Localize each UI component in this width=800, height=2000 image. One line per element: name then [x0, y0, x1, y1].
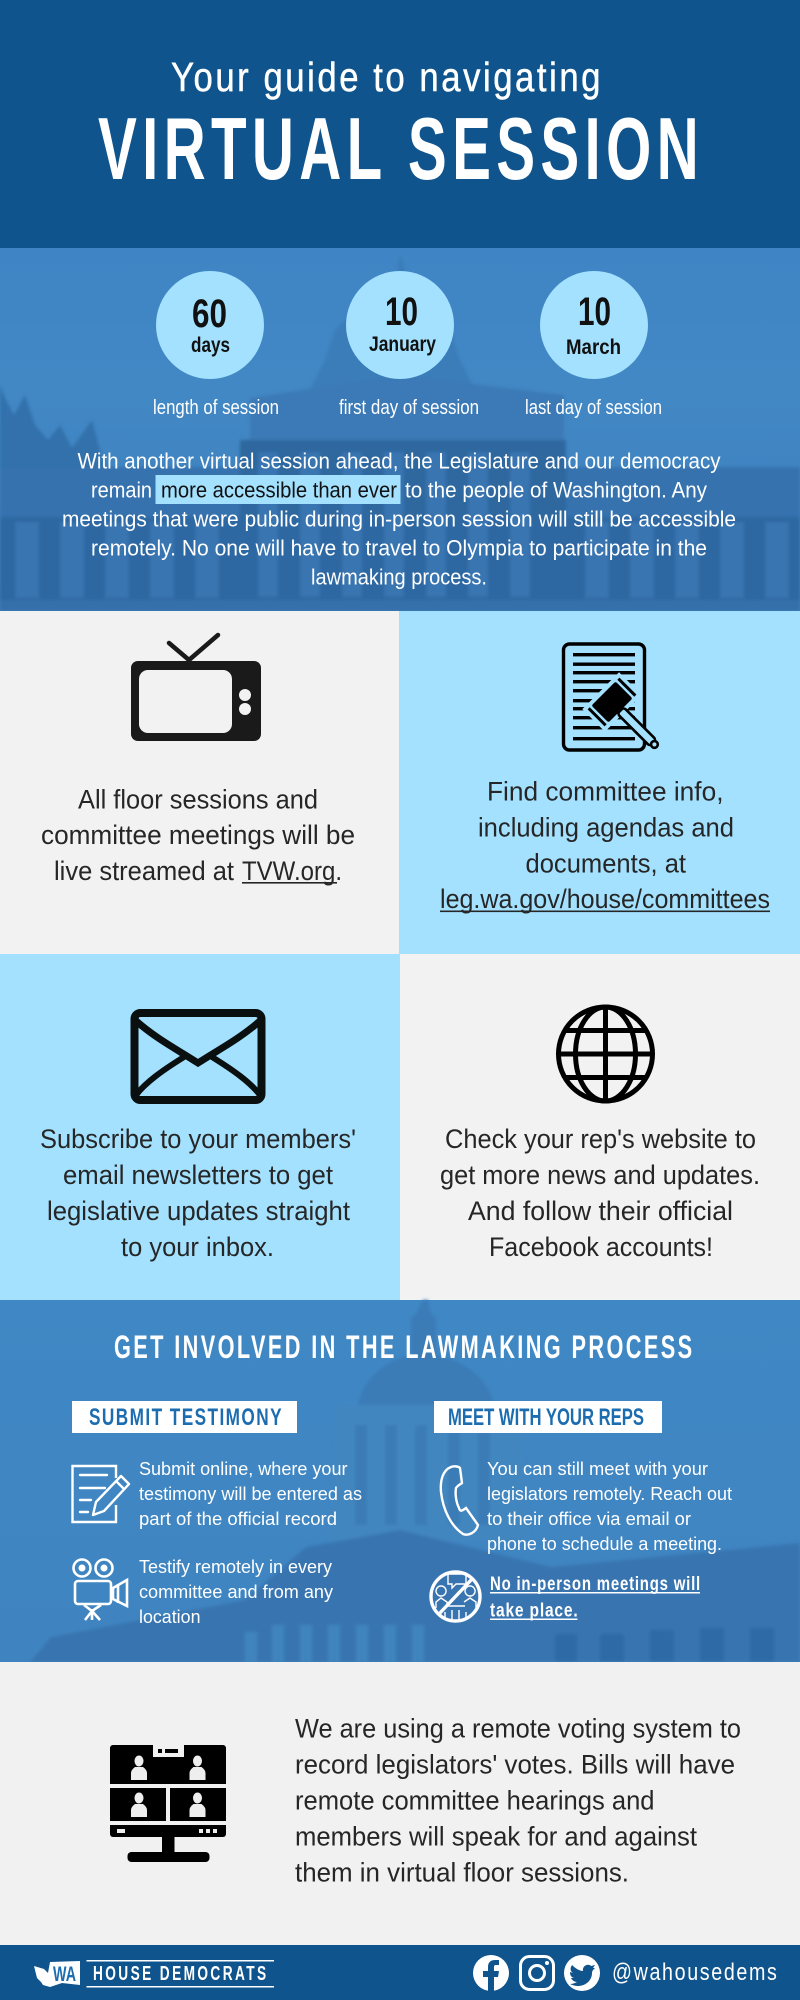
intro paragraph [62, 448, 736, 590]
live stream text: live streamed at [54, 856, 234, 886]
meet reps text: phone to schedule a meeting. [487, 1534, 722, 1554]
subtitle: Your guide to navigating [171, 54, 603, 100]
website text: get more news and updates. [440, 1160, 760, 1190]
website text [440, 1124, 760, 1262]
intro paragraph: to the people of Washington. Any [405, 478, 707, 502]
committee info text [440, 776, 770, 914]
panel: live stream tile [0, 611, 399, 954]
icon: television [131, 635, 261, 741]
submit online text: part of the official record [139, 1509, 337, 1529]
no in-person callout: take place. [490, 1600, 578, 1622]
stat: 10 March: March [566, 336, 621, 359]
submit online text [139, 1459, 362, 1529]
stat label: last day: last day of session [525, 397, 662, 419]
stat: 60 days [156, 271, 264, 379]
icon: film camera [74, 1560, 127, 1620]
newsletter text: to your inbox. [121, 1232, 274, 1262]
website text: Check your rep's website to [445, 1124, 756, 1154]
intro paragraph: more accessible than ever [161, 478, 397, 502]
meet reps text: legislators remotely. Reach out [487, 1484, 732, 1504]
icon: no in-person meetings [431, 1572, 480, 1621]
live stream text: TVW.org. [242, 856, 342, 886]
stat: 60 days: 60 [192, 292, 227, 336]
submit online text: testimony will be entered as [139, 1484, 362, 1504]
icon: document and gavel [564, 644, 675, 765]
icon: instagram [520, 1956, 554, 1990]
logo: WA House Democrats: WA [53, 1963, 76, 1986]
stat: 10 March [540, 271, 648, 379]
live stream text: All floor sessions and [78, 784, 318, 814]
capitol dome backdrop [30, 1300, 800, 1662]
committee info text: including agendas and [478, 812, 734, 842]
no in-person callout: No in-person meetings will [490, 1574, 701, 1595]
label: meet with your reps [434, 1401, 662, 1433]
testify text: committee and from any [139, 1582, 333, 1602]
remote voting text: We are using a remote voting system to [295, 1714, 741, 1744]
label: meet with your reps: MEET WITH YOUR REPS [448, 1404, 644, 1431]
panel: remote voting [0, 1662, 800, 1945]
intro paragraph: remotely. No one will have to travel to Olympia to participate in the [91, 536, 707, 560]
live stream text: committee meetings will be [41, 820, 355, 850]
stat: 10 January: January [369, 333, 436, 356]
intro paragraph: With another virtual session ahead, the Legislature and our democracy [78, 448, 720, 474]
submit online text: Submit online, where your [139, 1459, 348, 1479]
newsletter text [40, 1124, 356, 1262]
icon: video call monitor [110, 1745, 226, 1862]
capitol photo backdrop [0, 257, 800, 611]
panel: get involved [0, 1300, 800, 1662]
intro paragraph: remain [91, 478, 152, 502]
committee info text: leg.wa.gov/house/committees [440, 884, 770, 914]
website text: And follow their official [468, 1196, 733, 1226]
icon: telephone [441, 1466, 478, 1535]
footer [0, 1945, 800, 2000]
newsletter text: Subscribe to your members' [40, 1124, 356, 1154]
stat: 60 days: days [191, 334, 230, 357]
remote voting text: members will speak for and against [295, 1822, 697, 1852]
remote voting text: them in virtual floor sessions. [295, 1858, 629, 1888]
panel: website tile [400, 954, 800, 1300]
remote voting text: remote committee hearings and [295, 1786, 654, 1816]
meet reps text: You can still meet with your [487, 1459, 708, 1479]
committee info text: documents, at [526, 848, 686, 878]
panel: committee info tile [399, 611, 800, 954]
stat label: length: length of session [153, 397, 279, 419]
label: submit testimony [72, 1401, 297, 1433]
header band [0, 0, 800, 248]
logo: WA House Democrats [34, 1960, 274, 1988]
remote voting text [295, 1714, 741, 1888]
label: submit testimony: SUBMIT TESTIMONY [89, 1404, 283, 1431]
meet reps text: to their office via email or [487, 1509, 691, 1529]
icon: facebook [473, 1955, 509, 1991]
remote voting text: record legislators' votes. Bills will have [295, 1750, 735, 1780]
testify text: location [139, 1607, 200, 1627]
testify text [139, 1557, 333, 1627]
icon: globe [558, 1007, 653, 1101]
logo: WA House Democrats: HOUSE DEMOCRATS [93, 1963, 268, 1985]
stat: 10 January [346, 271, 454, 379]
panel: newsletter tile [0, 954, 400, 1300]
icon: envelope [134, 1013, 262, 1100]
testify text: Testify remotely in every [139, 1557, 332, 1577]
newsletter text: email newsletters to get [63, 1160, 333, 1190]
intro paragraph: meetings that were public during in-person session will still be accessible [62, 506, 736, 532]
committee info text: Find committee info, [487, 776, 724, 806]
meet reps text [487, 1459, 732, 1554]
no in-person callout [490, 1574, 701, 1622]
stat: 10 March: 10 [578, 290, 611, 334]
icon: twitter [564, 1955, 600, 1991]
icon: testimony form [72, 1466, 129, 1522]
website text: Facebook accounts! [489, 1232, 713, 1262]
newsletter text: legislative updates straight [47, 1196, 350, 1226]
intro paragraph: lawmaking process. [311, 564, 487, 590]
live stream text [41, 784, 355, 886]
stat label: first day: first day of session [339, 397, 479, 419]
panel: session facts [0, 248, 800, 611]
stat: 10 January: 10 [385, 290, 418, 334]
